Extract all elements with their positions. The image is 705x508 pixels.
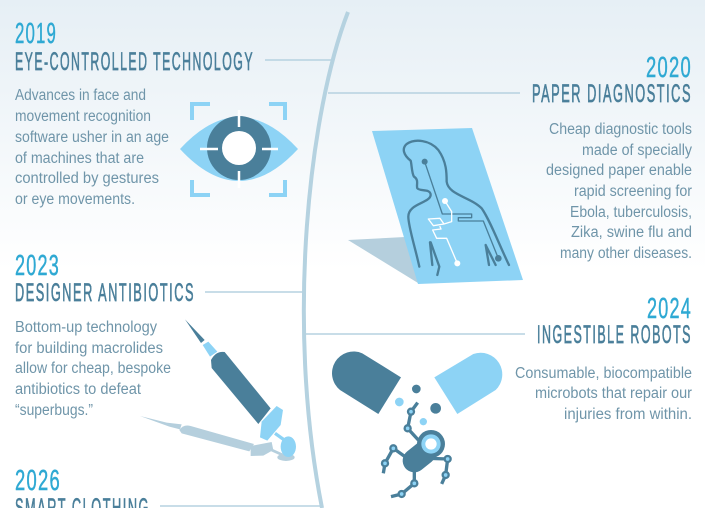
icon: syringe with shadow [140,319,296,461]
year 2019: 2019 [15,18,57,50]
text block 2023: “superbugs.” [15,402,93,419]
text block 2023: antibiotics to defeat [15,381,142,398]
text block 2020: designed paper enable [546,162,692,179]
text block 2020: Cheap diagnostic tools [549,121,692,138]
year 2023: 2023 [15,250,60,282]
connector 2019 [265,59,332,61]
text block 2024: injuries from within. [564,406,692,423]
icon: open capsule with microbot [332,352,502,497]
text block 2023: allow for cheap, bespoke [15,360,171,377]
connector 2026 [160,505,320,507]
year 2026: 2026 [15,465,61,497]
panel: 2023 designer antibiotics [15,250,303,461]
panel: 2019 eye-controlled technology: EYE-CONTROLLED TECHNOLOGY [15,48,254,76]
panel: 2019 eye-controlled technology [15,18,332,208]
text block 2023: for building macrolides [15,340,163,357]
connector 2020 [328,92,520,94]
text block 2020: rapid screening for [574,183,692,200]
text block 2019: of machines that are [15,150,144,167]
connector 2023 [205,291,303,293]
text block 2019 [15,87,169,208]
text block 2019: Advances in face and [15,87,146,104]
panel: 2024 ingestible robots [305,293,692,497]
text block 2020: many other diseases. [560,245,692,262]
panel: 2026 smart clothing [15,465,320,508]
icon: diagnostic paper with human figure [348,128,523,284]
text block 2020 [546,121,692,262]
text block 2020: made of specially [582,142,692,159]
text block 2019: controlled by gestures [15,170,159,187]
icon: eye with focus brackets [180,104,298,195]
text block 2019: or eye movements. [15,191,135,208]
timeline curve [304,12,348,508]
text block 2019: software usher in an age [15,129,169,146]
text block 2023 [15,319,171,419]
text block 2024 [515,365,692,423]
heading: designer antibiotics: DESIGNER ANTIBIOTICS [15,279,195,307]
connector 2024 [305,333,525,335]
panel: 2020 paper diagnostics [328,52,692,284]
text block 2020: Ebola, tuberculosis, [570,204,692,221]
text block 2023: Bottom-up technology [15,319,157,336]
text block 2020: Zika, swine flu and [571,224,692,241]
text block 2024: microbots that repair our [535,385,692,402]
text block 2024: Consumable, biocompatible [515,365,692,382]
text block 2019: movement recognition [15,108,151,125]
